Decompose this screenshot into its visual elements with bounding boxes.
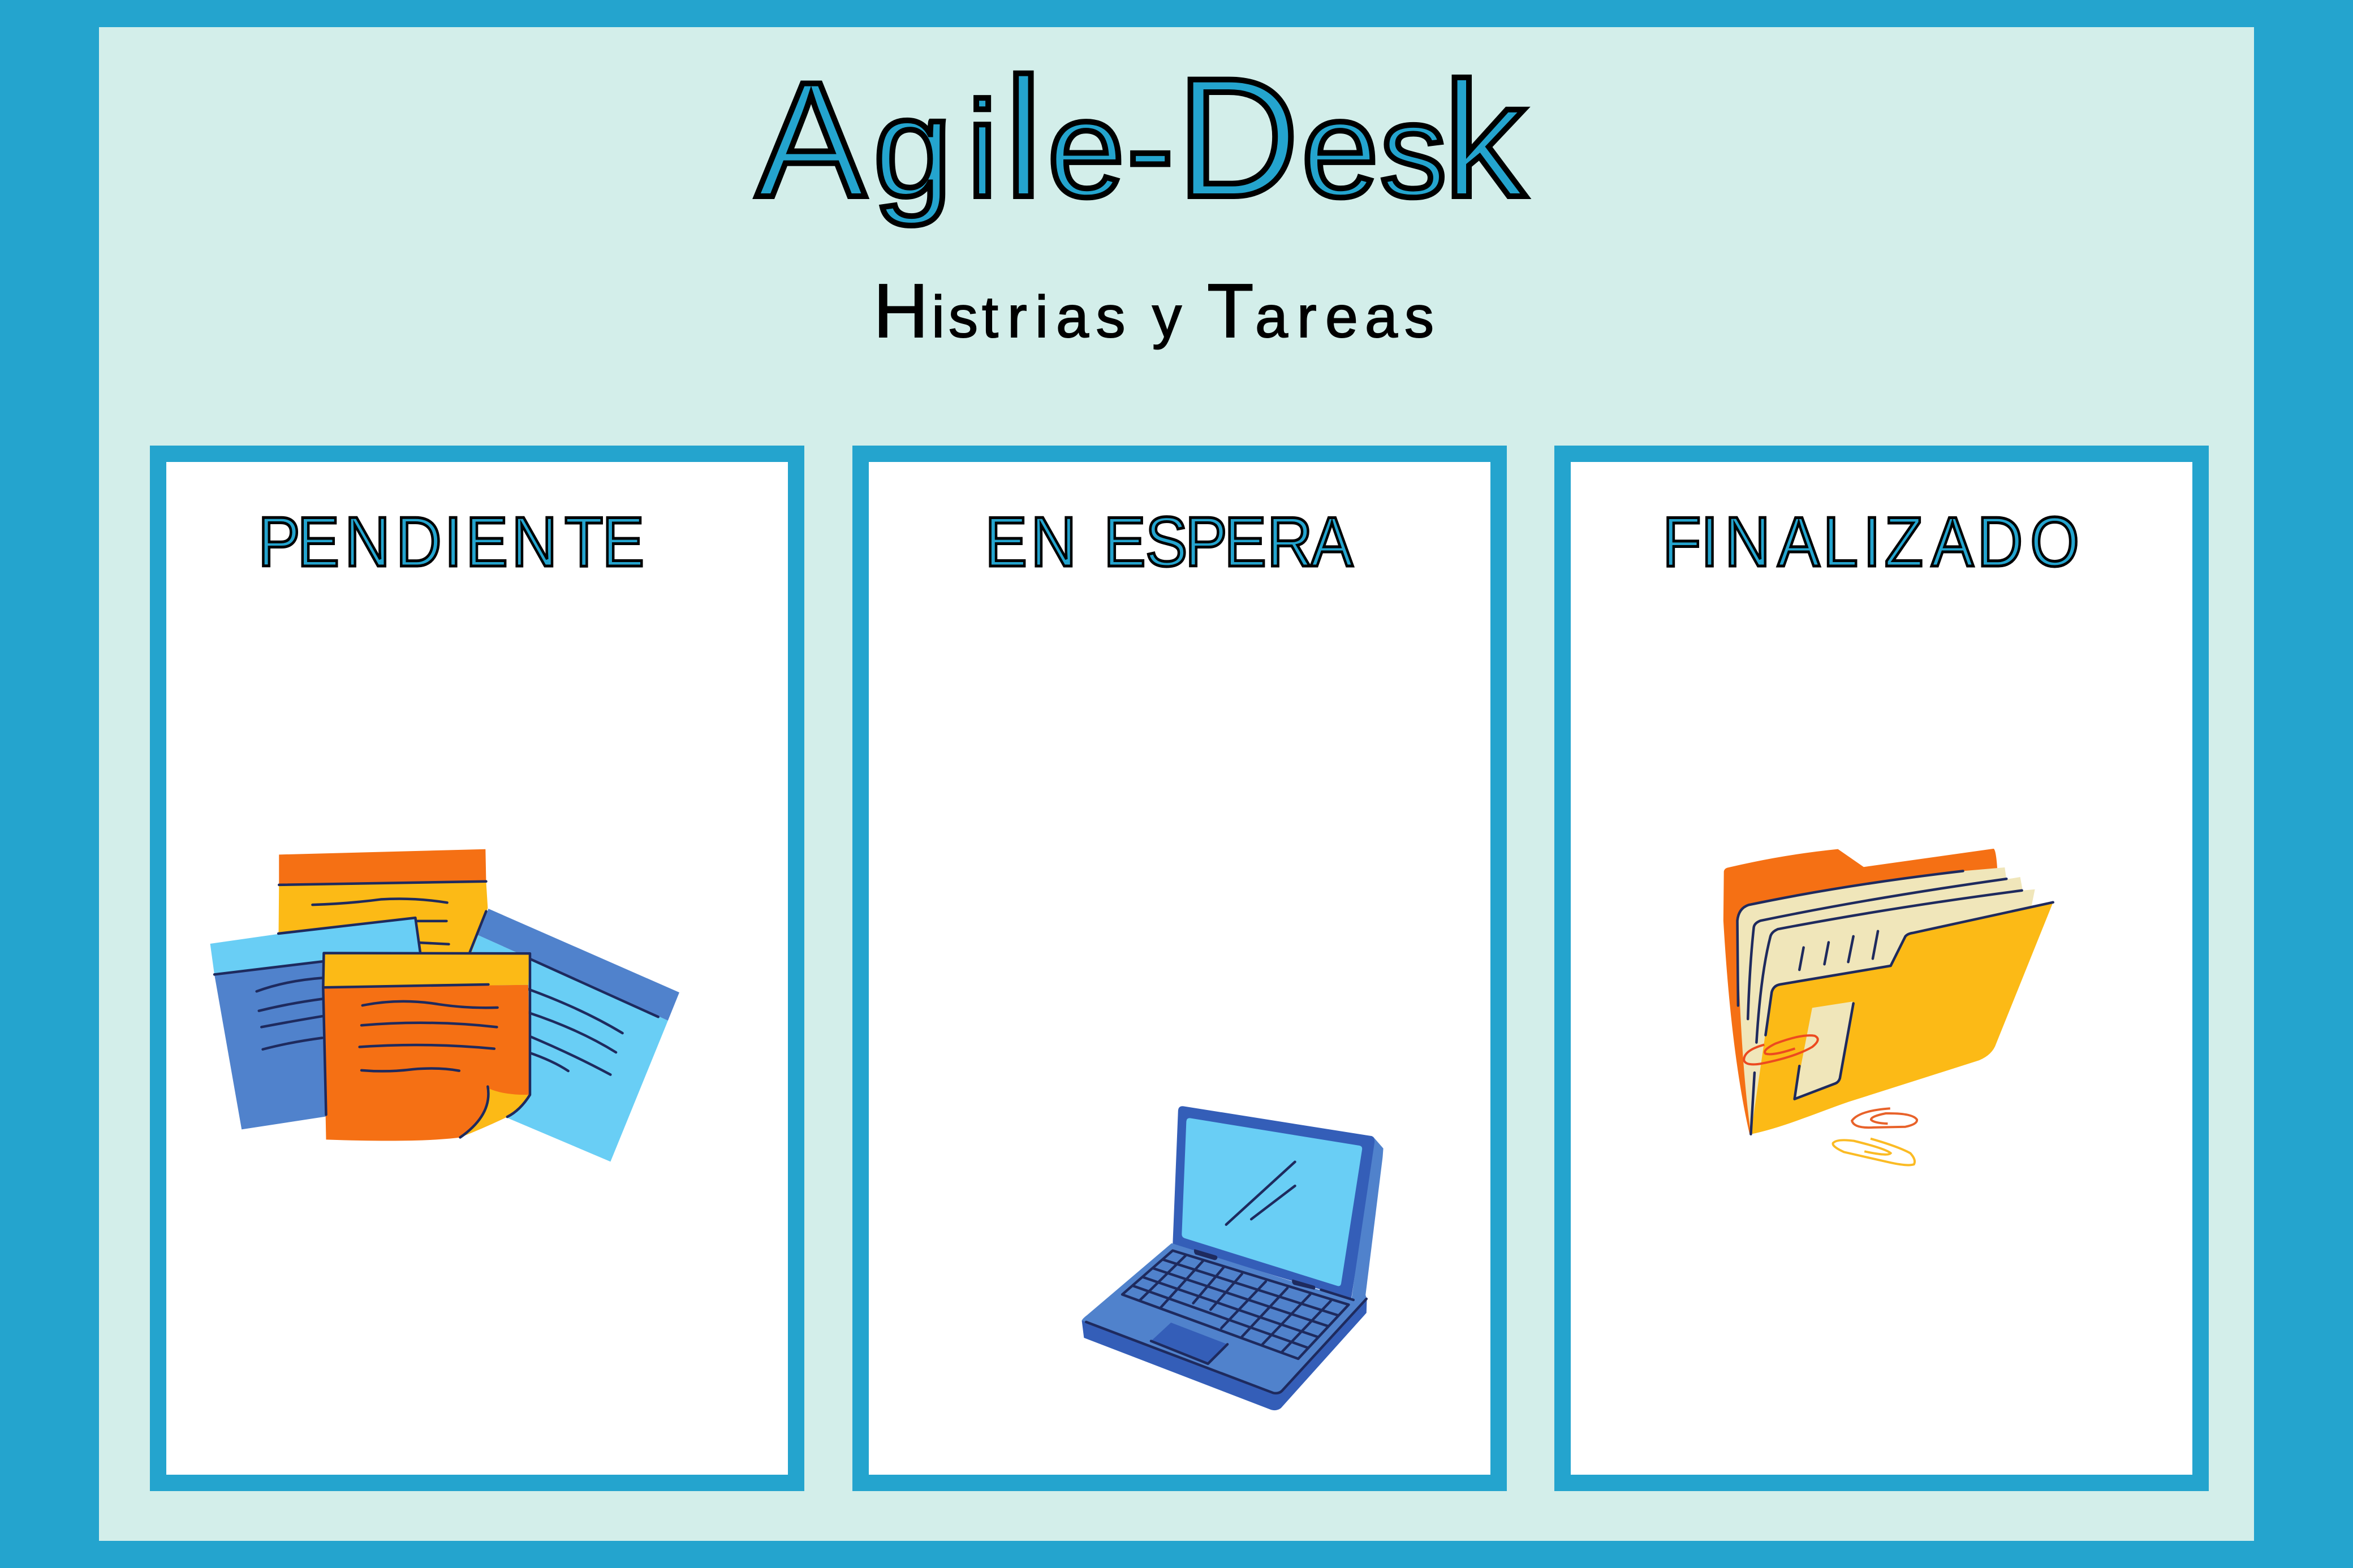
panel: finalizado [1562, 453, 2200, 1483]
laptop lid [1173, 1106, 1384, 1301]
icon: sticky notes [210, 849, 679, 1161]
folder front [1751, 902, 2053, 1134]
subtitle: H [873, 268, 929, 353]
heading: finalizado: FINALIZADO [1662, 503, 2079, 581]
note: front orange [323, 953, 530, 1141]
heading: pendiente: PENDIENTE [258, 503, 644, 581]
title: e [1302, 71, 1378, 226]
note: left blue [210, 918, 423, 1129]
title: s [1380, 76, 1447, 224]
title: l [1005, 42, 1042, 232]
laptop base [1082, 1243, 1367, 1410]
title: - [1127, 68, 1174, 226]
note: back yellow [278, 849, 488, 961]
paperclip: red [1744, 1035, 1818, 1064]
icon: folder [1723, 849, 2053, 1165]
folder back [1723, 849, 1997, 1134]
title: e [1048, 71, 1124, 226]
panel: en espera [861, 453, 1499, 1483]
title: k [1443, 48, 1528, 231]
title: i [967, 74, 997, 225]
panel: pendiente [158, 453, 796, 1483]
title: g [873, 68, 952, 226]
keyboard [1122, 1251, 1348, 1359]
subtitle: areas [1255, 284, 1434, 350]
heading: en espera: EN ESPERA [985, 503, 1353, 581]
note: right blue [470, 909, 679, 1161]
subtitle: T [1207, 268, 1253, 353]
icon: laptop [1082, 1106, 1384, 1410]
title: D [1176, 42, 1299, 232]
paperclip: orange [1852, 1108, 1917, 1128]
folder pages [1738, 867, 2035, 1134]
title: A [756, 48, 867, 231]
paperclip: yellow [1833, 1139, 1915, 1165]
subtitle: istrias y [932, 284, 1216, 350]
